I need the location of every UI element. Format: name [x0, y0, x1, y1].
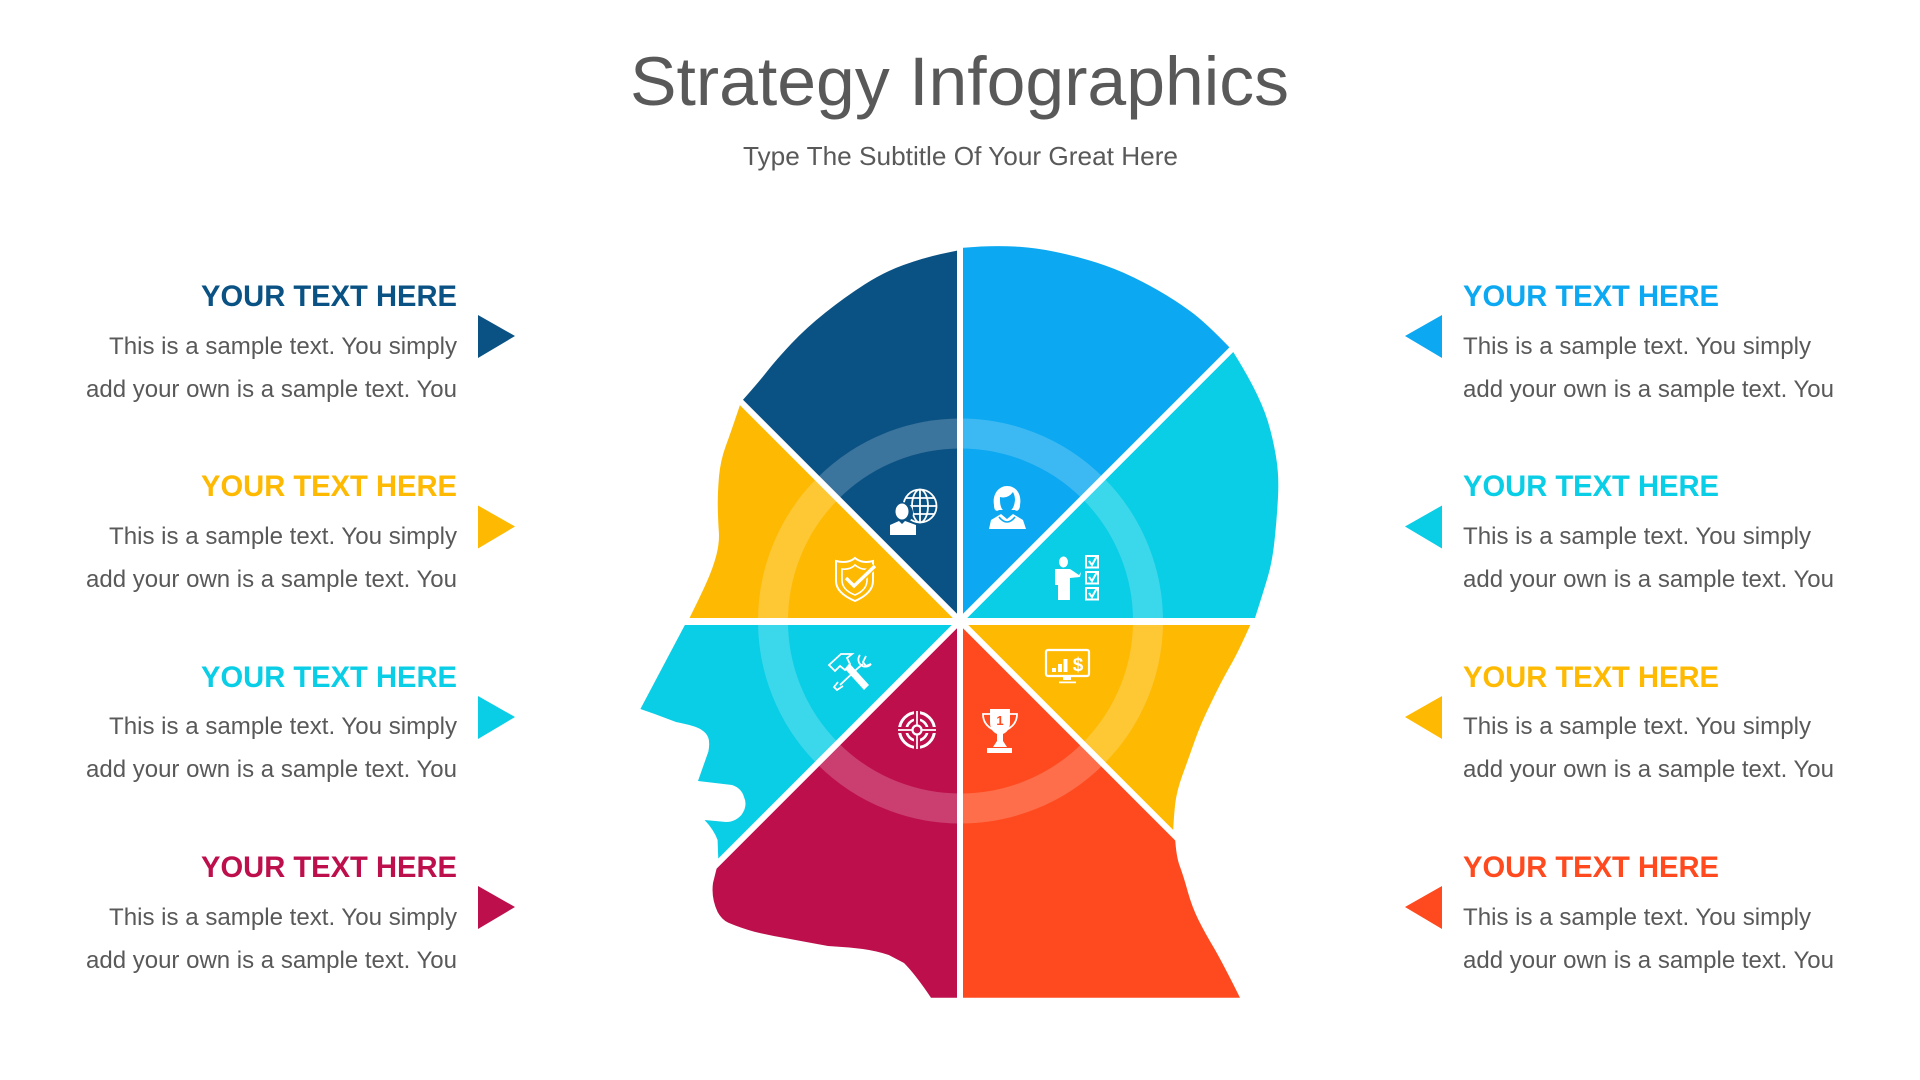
icon: person with globe: [890, 490, 936, 535]
wedge: orange neck: [960, 621, 1240, 998]
arrow: [1405, 315, 1442, 358]
right item 1: [1405, 280, 1834, 403]
heading: YOUR TEXT HERE: [1463, 470, 1719, 503]
right item 4: [1405, 851, 1834, 974]
left item 3: [86, 661, 515, 783]
body text: This is a sample text. You simply: [109, 333, 457, 360]
body text: This is a sample text. You simply: [1463, 333, 1811, 360]
heading: YOUR TEXT HERE: [201, 280, 457, 313]
head diagram: [640, 236, 1278, 1000]
right item 3: [1405, 661, 1834, 783]
body text: This is a sample text. You simply: [1463, 523, 1811, 550]
body text: add your own is a sample text. You: [1463, 376, 1834, 403]
wedge: crimson jaw: [713, 621, 960, 998]
body text: This is a sample text. You simply: [109, 523, 457, 550]
body text: This is a sample text. You simply: [1463, 904, 1811, 931]
wedge: yellow forehead: [688, 402, 960, 621]
body text: add your own is a sample text. You: [1463, 947, 1834, 974]
body text: [1463, 904, 1834, 974]
icon: monitor with chart: $: [1073, 655, 1084, 676]
body text: add your own is a sample text. You: [86, 947, 457, 974]
arrow: [478, 696, 515, 739]
wedge: light blue crown: [960, 246, 1232, 621]
subtitle: Type The Subtitle Of Your Great Here: [743, 141, 1178, 171]
body text: add your own is a sample text. You: [86, 756, 457, 783]
heading: YOUR TEXT HERE: [1463, 851, 1719, 884]
heading: YOUR TEXT HERE: [201, 470, 457, 503]
left item 2: [86, 470, 515, 593]
body text: [1463, 523, 1834, 593]
body text: [86, 523, 457, 593]
heading: YOUR TEXT HERE: [201, 851, 457, 884]
translucent ring: [773, 434, 1148, 808]
wedge: cyan back of head: [960, 350, 1278, 621]
body text: [86, 713, 457, 783]
arrow: [1405, 696, 1442, 739]
icon: trophy: [983, 709, 1017, 753]
arrow: [478, 886, 515, 929]
arrow: [478, 315, 515, 358]
icon: presenter with checklist: [1055, 556, 1098, 600]
body text: [86, 904, 457, 974]
right item 2: [1405, 470, 1834, 593]
body text: add your own is a sample text. You: [1463, 566, 1834, 593]
body text: add your own is a sample text. You: [86, 566, 457, 593]
icon: woman: [989, 486, 1026, 529]
heading: YOUR TEXT HERE: [1463, 280, 1719, 313]
heading: YOUR TEXT HERE: [1463, 661, 1719, 694]
body text: [1463, 713, 1834, 783]
icon: target: [897, 710, 937, 750]
icon: monitor with chart: [1046, 650, 1089, 683]
body text: This is a sample text. You simply: [109, 904, 457, 931]
left item 1: [86, 280, 515, 403]
wedge: yellow nape: [960, 621, 1252, 835]
arrow: [1405, 886, 1442, 929]
wedge: cyan face: [640, 621, 960, 863]
body text: [1463, 333, 1834, 403]
body text: This is a sample text. You simply: [109, 713, 457, 740]
heading: YOUR TEXT HERE: [201, 661, 457, 694]
icon: hammer and wrench: [829, 654, 871, 690]
title: Strategy Infographics: [630, 43, 1289, 120]
body text: This is a sample text. You simply: [1463, 713, 1811, 740]
arrow: [1405, 506, 1442, 548]
icon: shield with check: [836, 558, 875, 601]
icon: trophy: 1: [996, 713, 1004, 728]
arrow: [478, 506, 515, 548]
wedge: dark blue crown: [741, 250, 960, 621]
body text: add your own is a sample text. You: [1463, 756, 1834, 783]
body text: add your own is a sample text. You: [86, 376, 457, 403]
body text: [86, 333, 457, 403]
left item 4: [86, 851, 515, 974]
